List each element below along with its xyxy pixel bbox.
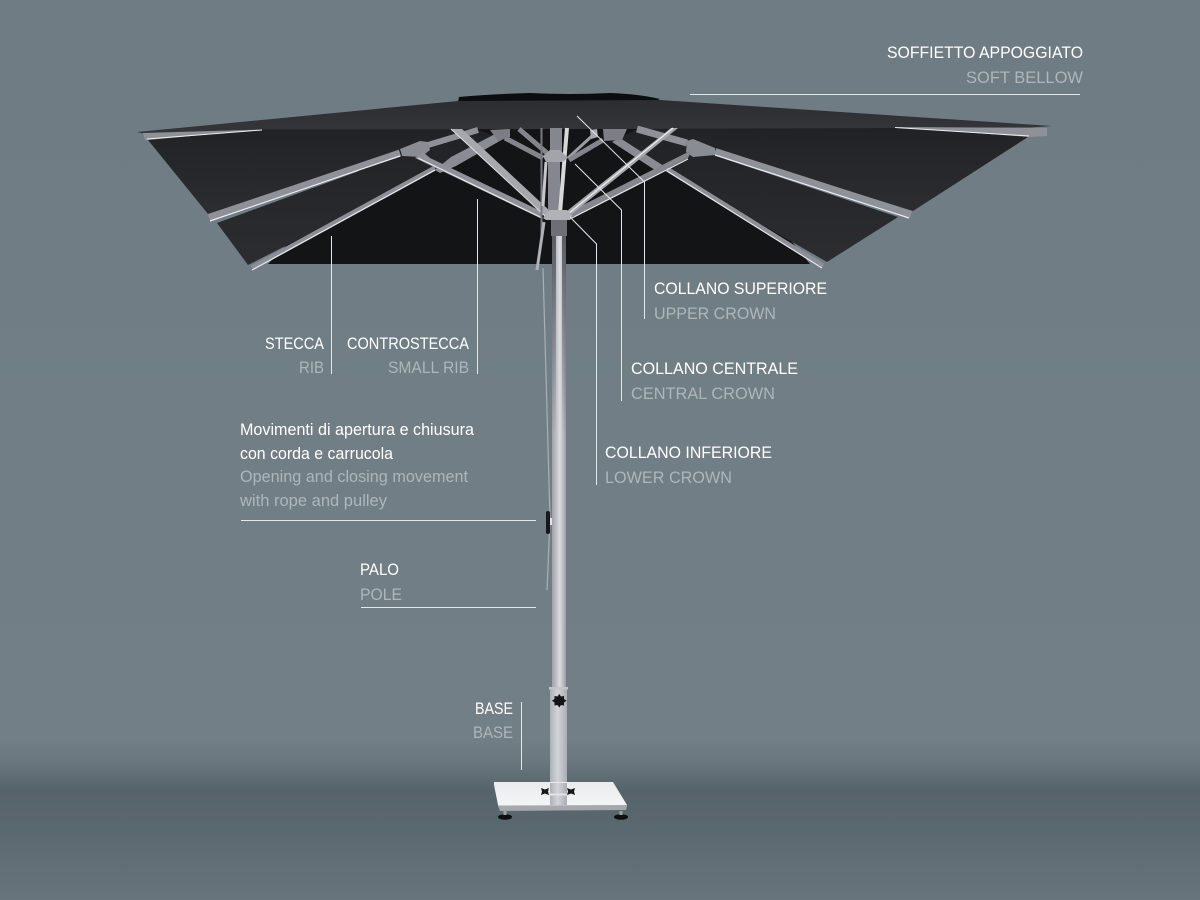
label: pole: PALO	[360, 560, 399, 579]
canopy right panel upper	[637, 128, 1040, 211]
sleeve knob	[552, 694, 566, 708]
label: soft bellow	[690, 43, 1083, 94]
label: rope and pulley movement: Movimenti di apertura e chiusura	[240, 420, 475, 439]
label: pole: POLE	[360, 585, 402, 604]
label: base	[473, 699, 522, 770]
label: central crown: CENTRAL CROWN	[631, 384, 775, 403]
left back rib	[252, 133, 505, 270]
rope	[543, 268, 550, 590]
right strut	[569, 150, 692, 218]
label: lower crown: LOWER CROWN	[605, 468, 732, 487]
label: soft bellow: SOFFIETTO APPOGGIATO	[887, 43, 1083, 62]
base feet	[498, 811, 628, 820]
label: rope and pulley movement	[239, 420, 536, 520]
base plate	[494, 782, 627, 811]
upper crown struts	[490, 129, 627, 160]
label: lower crown: COLLANO INFERIORE	[605, 443, 772, 462]
label: rope and pulley movement: with rope and pulley	[239, 491, 387, 510]
pole sleeve	[550, 689, 567, 805]
label: rib	[265, 236, 332, 377]
rope tassel	[537, 222, 544, 270]
label: central crown	[575, 164, 798, 403]
canopy underside back	[268, 128, 810, 264]
label: small rib	[347, 199, 478, 377]
canopy top band	[137, 100, 1052, 134]
label: rope and pulley movement: con corda e carrucola	[240, 444, 394, 463]
right diagonal strut	[567, 128, 678, 214]
label: small rib: CONTROSTECCA	[347, 334, 470, 353]
label: rib: RIB	[299, 358, 324, 377]
left corner rib	[143, 130, 262, 140]
base wing nuts	[541, 788, 575, 795]
label: base: BASE	[475, 699, 513, 718]
left diagonal strut	[451, 129, 550, 216]
left rib joint	[400, 141, 430, 157]
canopy left panel lower	[217, 130, 495, 265]
label: lower crown	[570, 217, 772, 487]
right main rib	[637, 129, 911, 218]
lower pole collar	[551, 220, 567, 236]
label: pole	[360, 560, 536, 608]
label: base: BASE	[473, 723, 513, 742]
label: rib: STECCA	[265, 334, 325, 353]
right back rib	[612, 138, 823, 268]
label: central crown: COLLANO CENTRALE	[631, 359, 798, 378]
left strut	[415, 152, 545, 218]
label: upper crown: COLLANO SUPERIORE	[654, 279, 827, 298]
label: rope and pulley movement: Opening and closing movement	[240, 467, 468, 486]
pole sleeve collar	[549, 687, 568, 690]
right corner rib	[895, 127, 1047, 137]
label: upper crown: UPPER CROWN	[654, 304, 776, 323]
label: soft bellow: SOFT BELLOW	[966, 68, 1083, 87]
central column	[542, 128, 567, 240]
label: small rib: SMALL RIB	[388, 358, 469, 377]
canopy left panel upper	[146, 128, 478, 214]
left main rib	[209, 130, 478, 221]
soft bellow	[458, 93, 660, 104]
label: upper crown	[577, 116, 827, 323]
canopy right panel lower	[620, 129, 898, 262]
pulley	[546, 511, 552, 534]
lower crown hub	[543, 210, 573, 220]
umbrella	[137, 93, 1052, 820]
pole	[552, 236, 566, 691]
upper crown hub	[543, 150, 568, 162]
right rib joint	[686, 139, 715, 157]
